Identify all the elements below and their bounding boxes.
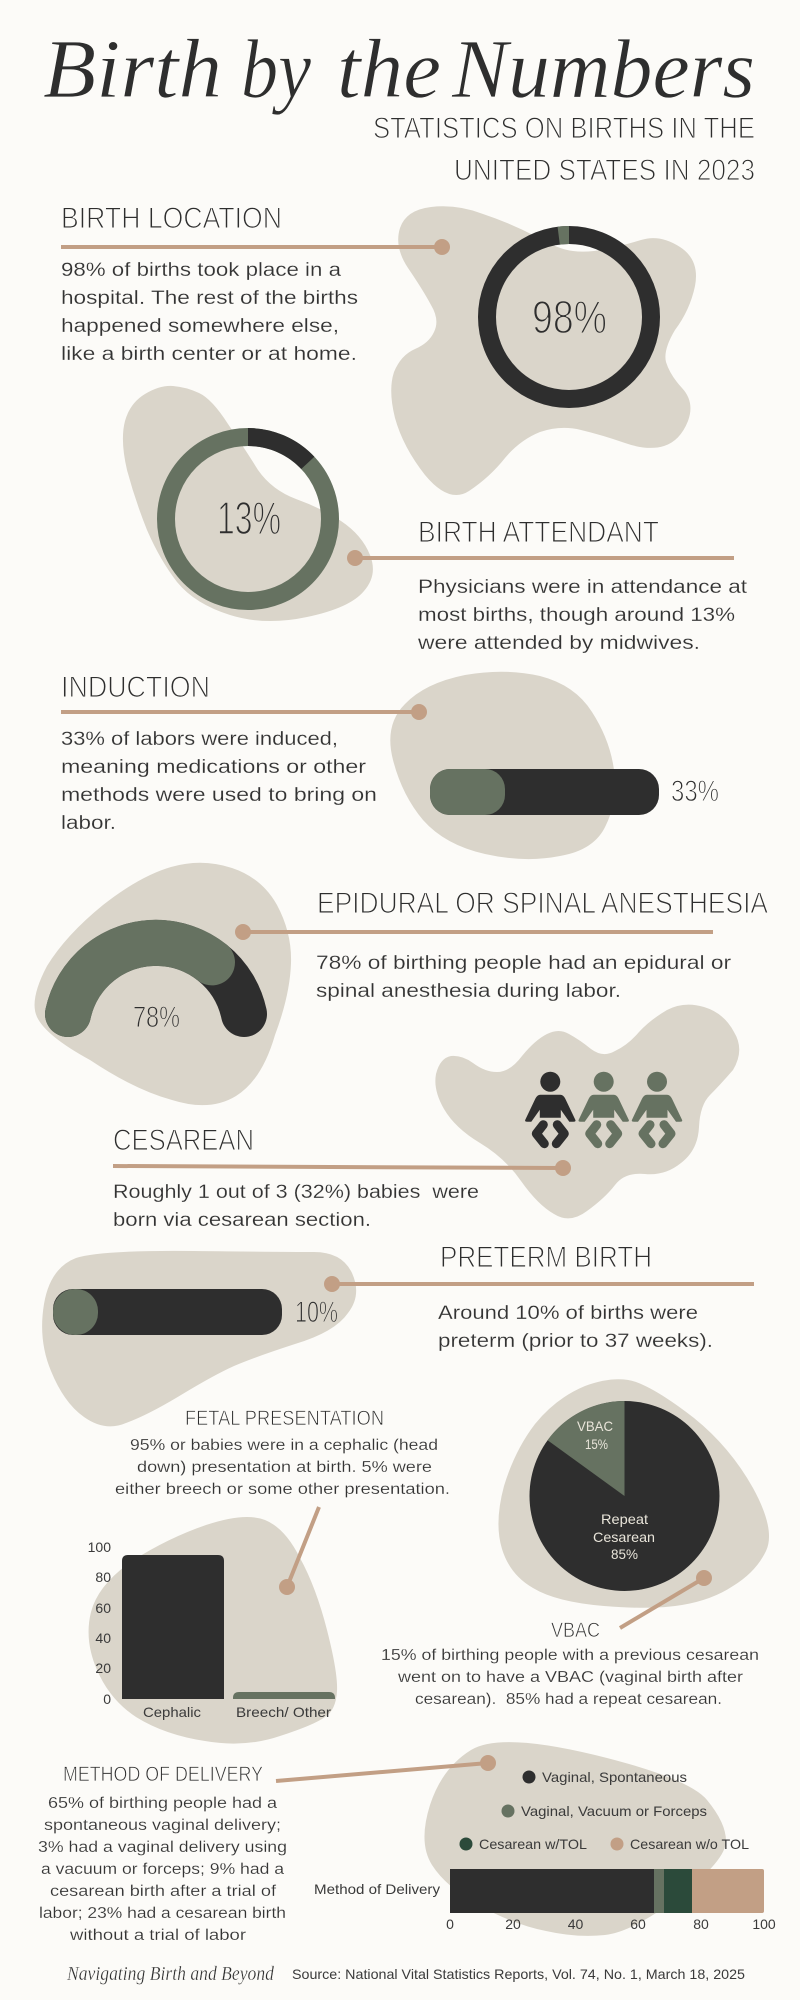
panel: method of delivery — [38, 1742, 776, 1944]
blob: birth attendant — [123, 386, 373, 621]
body text — [438, 1303, 713, 1352]
icon: green baby — [632, 1072, 682, 1144]
body text: were attended by midwives. — [417, 633, 700, 654]
body text: spinal anesthesia during labor. — [316, 981, 621, 1002]
body text: went on to have a VBAC (vaginal birth after — [397, 1669, 743, 1686]
bar chart: 20 — [95, 1660, 111, 1676]
stacked bar chart: 40 — [568, 1916, 583, 1932]
gauge chart: 78% — [68, 943, 244, 1014]
stacked bar chart — [314, 1869, 776, 1932]
body text — [417, 577, 748, 654]
heading: VBAC — [551, 1619, 600, 1642]
bar chart: 80 — [95, 1569, 111, 1585]
connector line with dot — [276, 1755, 496, 1781]
legend: Cesarean w/o TOL — [630, 1836, 749, 1852]
body text: like a birth center or at home. — [61, 344, 357, 365]
legend — [460, 1769, 749, 1852]
source note: Source: National Vital Statistics Reports, Vol. 74, No. 1, March 18, 2025 — [292, 1966, 745, 1982]
connector line with dot — [279, 1507, 319, 1595]
panel: cesarean — [113, 1005, 739, 1231]
body text: labor. — [61, 813, 116, 834]
connector line with dot — [235, 924, 713, 940]
icon: dark baby — [525, 1072, 576, 1144]
connector line with dot — [113, 1160, 571, 1176]
body text: 65% of birthing people had a — [48, 1795, 277, 1812]
bar chart: 60 — [95, 1600, 111, 1616]
progress bar: 10% — [53, 1289, 282, 1335]
stacked bar chart: 100 — [752, 1916, 776, 1932]
blob: method of delivery — [424, 1742, 726, 1936]
heading: METHOD OF DELIVERY — [63, 1763, 263, 1786]
donut value: 98% — [532, 291, 607, 343]
body text: either breech or some other presentation. — [115, 1481, 450, 1498]
body text: born via cesarean section. — [113, 1210, 371, 1231]
gauge value: 78% — [133, 1001, 180, 1034]
body text — [38, 1795, 287, 1944]
panel: preterm birth — [42, 1241, 754, 1426]
body text — [316, 953, 732, 1002]
body text — [113, 1182, 479, 1231]
donut value: 13% — [217, 492, 281, 544]
body text: labor; 23% had a cesarean birth — [39, 1905, 286, 1922]
body text: 95% or babies were in a cephalic (head — [130, 1437, 438, 1454]
title: the — [337, 23, 441, 116]
body text: most births, though around 13% — [418, 605, 735, 626]
bar chart: 100 — [88, 1539, 111, 1555]
body text: methods were used to bring on — [61, 785, 377, 806]
blob: cesarean — [435, 1005, 739, 1218]
heading: PRETERM BIRTH — [440, 1241, 652, 1274]
connector line with dot — [61, 704, 427, 720]
bar chart: Cephalic — [143, 1704, 201, 1720]
body text: Physicians were in attendance at — [418, 577, 748, 598]
body text: Around 10% of births were — [438, 1303, 698, 1324]
progress bar: 33% — [430, 769, 659, 815]
blob: fetal presentation — [89, 1517, 337, 1744]
title — [43, 23, 755, 116]
body text: 98% of births took place in a — [61, 260, 342, 281]
pie chart: Repeat — [601, 1511, 648, 1527]
body text: spontaneous vaginal delivery; — [44, 1817, 281, 1834]
pie chart — [530, 1401, 720, 1591]
body text: happened somewhere else, — [61, 316, 339, 337]
pie chart: Cesarean — [593, 1529, 655, 1545]
body text — [61, 260, 358, 365]
pie chart: 85% — [611, 1546, 638, 1562]
body text: Roughly 1 out of 3 (32%) babies were — [113, 1182, 479, 1203]
stacked bar chart: 0 — [446, 1916, 454, 1932]
bar chart — [88, 1539, 335, 1720]
legend: Vaginal, Vacuum or Forceps — [521, 1803, 707, 1819]
body text: meaning medications or other — [61, 757, 367, 778]
body text: cesarean birth after a trial of — [50, 1883, 277, 1900]
connector line with dot — [347, 550, 734, 566]
body text: 33% of labors were induced, — [61, 729, 338, 750]
panel: epidural or spinal anesthesia — [35, 863, 768, 1105]
blob: preterm — [42, 1251, 356, 1426]
title: Numbers — [451, 23, 755, 116]
panel: VBAC — [381, 1379, 769, 1708]
body text: 15% of birthing people with a previous cesarean — [381, 1647, 759, 1664]
stacked bar chart: Method of Delivery — [314, 1881, 440, 1897]
title: by — [241, 23, 312, 116]
legend: Cesarean w/TOL — [479, 1836, 587, 1852]
connector line with dot — [620, 1570, 712, 1628]
heading: FETAL PRESENTATION — [185, 1407, 384, 1430]
connector line with dot — [324, 1276, 754, 1292]
stacked bar chart: 20 — [505, 1916, 521, 1932]
bar chart: 0 — [103, 1691, 111, 1707]
donut chart: 13% — [166, 437, 330, 601]
heading: INDUCTION — [61, 671, 210, 704]
panel: birth location — [61, 202, 696, 495]
body text — [115, 1437, 450, 1498]
body text — [381, 1647, 759, 1708]
bar chart: Breech/ Other — [236, 1704, 331, 1720]
panel: induction — [61, 671, 719, 859]
stacked bar chart: 80 — [693, 1916, 709, 1932]
subtitle — [373, 112, 755, 187]
bar chart: 40 — [95, 1630, 111, 1646]
pie chart: 15% — [585, 1436, 608, 1452]
body text: without a trial of labor — [69, 1927, 246, 1944]
pie chart: VBAC — [577, 1418, 613, 1434]
connector line with dot — [61, 239, 450, 255]
footer logo: Navigating Birth and Beyond — [66, 1963, 275, 1985]
panel: birth attendant — [123, 386, 748, 654]
bar value: 33% — [671, 775, 719, 808]
stacked bar chart: 60 — [630, 1916, 646, 1932]
blob: birth location — [391, 206, 696, 495]
blob: induction — [390, 672, 615, 859]
body text: down) presentation at birth. 5% were — [137, 1459, 432, 1476]
subtitle: UNITED STATES IN 2023 — [454, 154, 755, 187]
body text: cesarean). 85% had a repeat cesarean. — [415, 1691, 722, 1708]
body text: a vacuum or forceps; 9% had a — [41, 1861, 284, 1878]
heading: BIRTH ATTENDANT — [418, 516, 659, 549]
panel: fetal presentation — [88, 1407, 450, 1744]
icon: green baby — [578, 1072, 629, 1144]
blob: epidural — [35, 863, 291, 1105]
body text: 78% of birthing people had an epidural or — [316, 953, 732, 974]
body text: hospital. The rest of the births — [61, 288, 358, 309]
bar value: 10% — [295, 1296, 338, 1329]
donut chart: 98% — [487, 235, 651, 399]
body text: preterm (prior to 37 weeks). — [438, 1331, 713, 1352]
body text — [61, 729, 377, 834]
body text: 3% had a vaginal delivery using — [38, 1839, 287, 1856]
legend: Vaginal, Spontaneous — [542, 1769, 687, 1785]
heading: CESAREAN — [113, 1124, 254, 1157]
title: Birth — [43, 23, 222, 116]
blob: VBAC — [498, 1379, 769, 1608]
heading: BIRTH LOCATION — [61, 202, 282, 235]
